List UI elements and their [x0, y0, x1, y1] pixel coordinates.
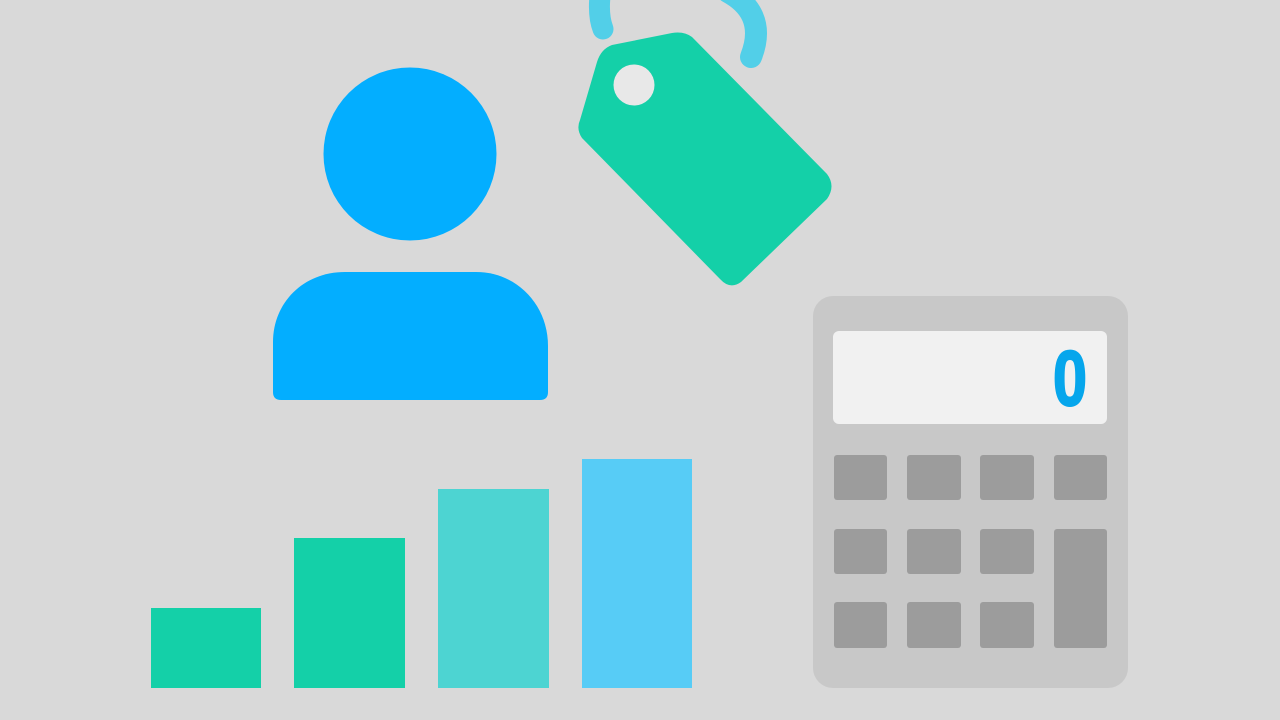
- bar 1: [151, 608, 261, 688]
- bar chart: [151, 459, 692, 688]
- bar 2: [294, 538, 405, 688]
- icon: price tag: [578, 0, 832, 285]
- display digit: 0: [1053, 334, 1087, 422]
- icon: calculator: [813, 296, 1128, 688]
- bar 3: [438, 489, 549, 688]
- icon: person: [273, 68, 548, 400]
- calculator display: [833, 331, 1107, 424]
- calculator keys: [834, 455, 1107, 648]
- bar 4: [582, 459, 692, 688]
